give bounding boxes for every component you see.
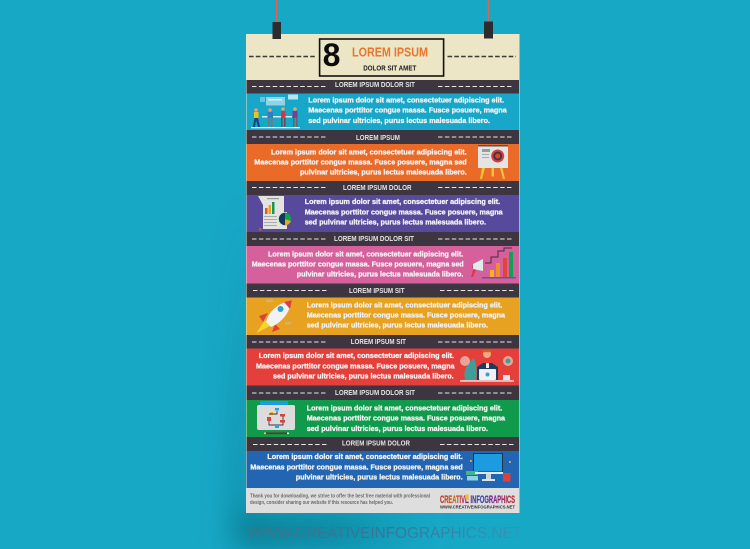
text block bbox=[307, 300, 506, 330]
footer note: design, consider sharing our website if this resource has helped you. bbox=[250, 500, 393, 506]
text block bbox=[252, 249, 464, 278]
text block: Maecenas porttitor congue massa. Fusce posuere, magna bbox=[256, 361, 455, 370]
panel: section 2: LOREM IPSUM bbox=[356, 135, 400, 142]
panel: section 5: LOREM IPSUM SIT bbox=[349, 288, 405, 295]
text block: Lorem ipsum dolor sit amet, consectetuer adipiscing elit. bbox=[305, 197, 500, 206]
text block: pulvinar ultricies, purus lectus malesuada libero. bbox=[297, 269, 463, 278]
hanging clip left bbox=[272, 0, 281, 39]
watermark url: WWW.CREATIVEINFOGRAPHICS.NET bbox=[248, 525, 522, 542]
text block: Lorem ipsum dolor sit amet, consectetuer adipiscing elit. bbox=[308, 95, 504, 104]
icon: team meeting bbox=[251, 94, 300, 128]
icon: flowchart scroll bbox=[257, 401, 295, 434]
logo bbox=[440, 494, 515, 510]
text block bbox=[256, 351, 455, 380]
text block: pulvinar ultricies, purus lectus malesuada libero. bbox=[296, 473, 463, 482]
poster sheet bbox=[246, 34, 520, 513]
text block: Maecenas porttitor congue massa. Fusce posuere, magna bbox=[308, 105, 507, 114]
text block: Lorem ipsum dolor sit amet, consectetuer adipiscing elit. bbox=[259, 351, 454, 360]
title block bbox=[249, 37, 516, 76]
panel: section 3: LOREM IPSUM DOLOR bbox=[343, 185, 412, 192]
text block: sed pulvinar ultricies, purus lectus malesuada libero. bbox=[305, 218, 486, 227]
title block: LOREM IPSUM bbox=[352, 45, 428, 60]
text block: sed pulvinar ultricies, purus lectus malesuada libero. bbox=[307, 321, 488, 330]
icon: desktop computer bbox=[466, 454, 511, 482]
text block: Lorem ipsum dolor sit amet, consectetuer adipiscing elit. bbox=[268, 249, 463, 258]
text block: Maecenas porttitor congue massa. Fusce posuere, magna bbox=[305, 208, 503, 216]
text block bbox=[308, 95, 507, 125]
panel: section 4: LOREM IPSUM DOLOR SIT bbox=[334, 236, 415, 243]
text block: Maecenas porttitor congue massa. Fusce posuere, magna sed bbox=[250, 462, 463, 471]
icon: target presentation board bbox=[478, 145, 508, 179]
footer note bbox=[250, 494, 430, 506]
logo: CREATIVE INFOGRAPHICS bbox=[440, 494, 515, 506]
text block: sed pulvinar ultricies, purus lectus malesuada libero. bbox=[273, 371, 454, 380]
text block: Maecenas porttitor congue massa. Fusce posuere, magna sed bbox=[254, 158, 467, 166]
text block bbox=[250, 452, 463, 482]
text block: Maecenas porttitor congue massa. Fusce posuere, magna sed bbox=[252, 259, 464, 268]
panel: section 2 bbox=[246, 130, 519, 181]
panel: section 6: LOREM IPSUM SIT bbox=[351, 339, 407, 346]
text block bbox=[254, 147, 467, 177]
panel: footer bbox=[246, 488, 520, 513]
text block: Lorem ipsum dolor sit amet, consectetuer adipiscing elit. bbox=[271, 147, 467, 156]
panel: section 3 bbox=[246, 181, 519, 232]
text block: sed pulvinar ultricies, purus lectus malesuada libero. bbox=[307, 424, 488, 433]
text block bbox=[307, 403, 506, 433]
panel: section 4 bbox=[246, 232, 519, 284]
text block: Lorem ipsum dolor sit amet, consectetuer adipiscing elit. bbox=[307, 300, 502, 309]
icon: businessman at laptop bbox=[460, 350, 514, 382]
footer note: Thank you for downloading, we strive to offer the best free material with professional bbox=[250, 494, 430, 500]
panel: section 8 bbox=[246, 437, 519, 488]
panel: section 1 bbox=[246, 80, 519, 130]
text block: sed pulvinar ultricies, purus lectus malesuada libero. bbox=[308, 116, 490, 125]
text block: Maecenas porttitor congue massa. Fusce posuere, magna bbox=[307, 311, 506, 320]
text block: Lorem ipsum dolor sit amet, consectetuer adipiscing elit. bbox=[307, 403, 502, 412]
panel: section 1: LOREM IPSUM DOLOR SIT bbox=[335, 82, 416, 89]
title block: 8 bbox=[323, 37, 340, 73]
panel: section 6 bbox=[246, 335, 519, 386]
text block: Lorem ipsum dolor sit amet, consectetuer adipiscing elit. bbox=[267, 452, 463, 461]
icon: growth chart with megaphone bbox=[471, 248, 516, 278]
panel: section 7 bbox=[246, 386, 519, 437]
logo: WWW.CREATIVEINFOGRAPHICS.NET bbox=[440, 504, 515, 510]
hanging clip right bbox=[484, 0, 493, 38]
text block: pulvinar ultricies, purus lectus malesuada libero. bbox=[300, 168, 467, 177]
icon: rocket bbox=[256, 300, 292, 333]
panel: section 5 bbox=[246, 284, 519, 335]
panel: section 8: LOREM IPSUM DOLOR bbox=[342, 440, 410, 448]
text block bbox=[305, 197, 503, 227]
panel: section 7: LOREM IPSUM DOLOR SIT bbox=[335, 390, 416, 397]
text block: Maecenas porttitor congue massa. Fusce posuere, magna bbox=[307, 414, 506, 423]
title block: DOLOR SIT AMET bbox=[363, 66, 417, 72]
icon: report with pie chart bbox=[258, 196, 291, 230]
